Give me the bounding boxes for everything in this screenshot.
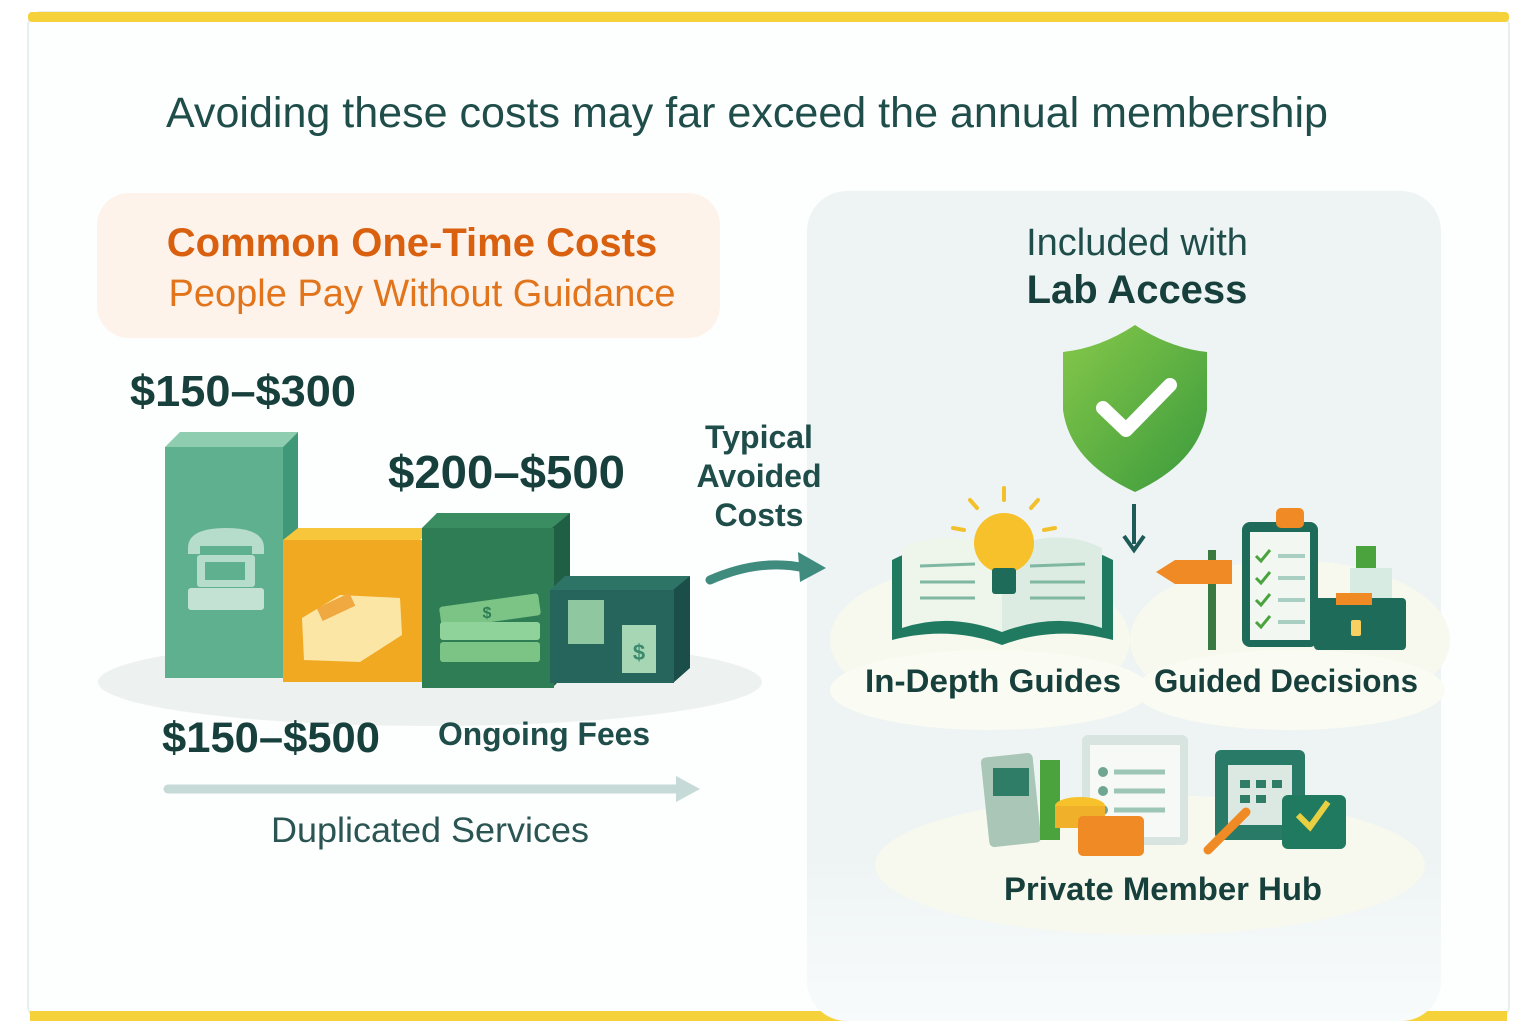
label: $150-$500: $150–$500 — [162, 714, 380, 762]
label: Duplicated Services: Duplicated Services — [271, 811, 589, 850]
icon: hub items — [980, 735, 1346, 856]
bar 2 cash stack — [283, 528, 433, 682]
label: $150-$300: $150–$300 — [130, 367, 356, 416]
label: Typical Avoided Costs: Costs — [715, 497, 803, 533]
title: Avoiding these costs may far exceed the annual membership — [166, 89, 1328, 137]
arrow: down — [1124, 504, 1144, 550]
label: Ongoing Fees: Ongoing Fees — [438, 716, 650, 752]
panel: Lab Access — [807, 191, 1450, 1021]
arrow: timeline — [168, 776, 700, 802]
label: Typical Avoided Costs — [696, 419, 822, 533]
label: Typical Avoided Costs: Avoided — [696, 458, 822, 494]
bar 3 money: $ — [483, 605, 492, 622]
icon: signpost, clipboard, briefcase — [1156, 508, 1406, 650]
bar 1 phone — [165, 432, 298, 678]
heading: Included with — [1026, 222, 1248, 264]
arrow: curved — [710, 552, 826, 582]
icon: book with bulb — [892, 488, 1113, 645]
label: $200-$500: $200–$500 — [388, 446, 625, 498]
label: Guided Decisions: Guided Decisions — [1154, 663, 1418, 699]
bar 4 bills — [550, 576, 690, 683]
label: Typical Avoided Costs: Typical — [705, 419, 813, 455]
panel: Lab Access: Lab Access — [1027, 268, 1247, 312]
bar chart — [98, 432, 762, 726]
panel: left header: People Pay Without Guidance — [169, 273, 675, 315]
label: In-Depth Guides: In-Depth Guides — [865, 663, 1121, 699]
panel: left header — [97, 193, 720, 338]
panel: left header: Common One-Time Costs — [167, 221, 657, 265]
bar 4 bills: $ — [633, 640, 645, 665]
icon: shield — [1063, 325, 1207, 492]
label: Private Member Hub: Private Member Hub — [1004, 871, 1322, 907]
bar 3 money — [422, 513, 570, 688]
